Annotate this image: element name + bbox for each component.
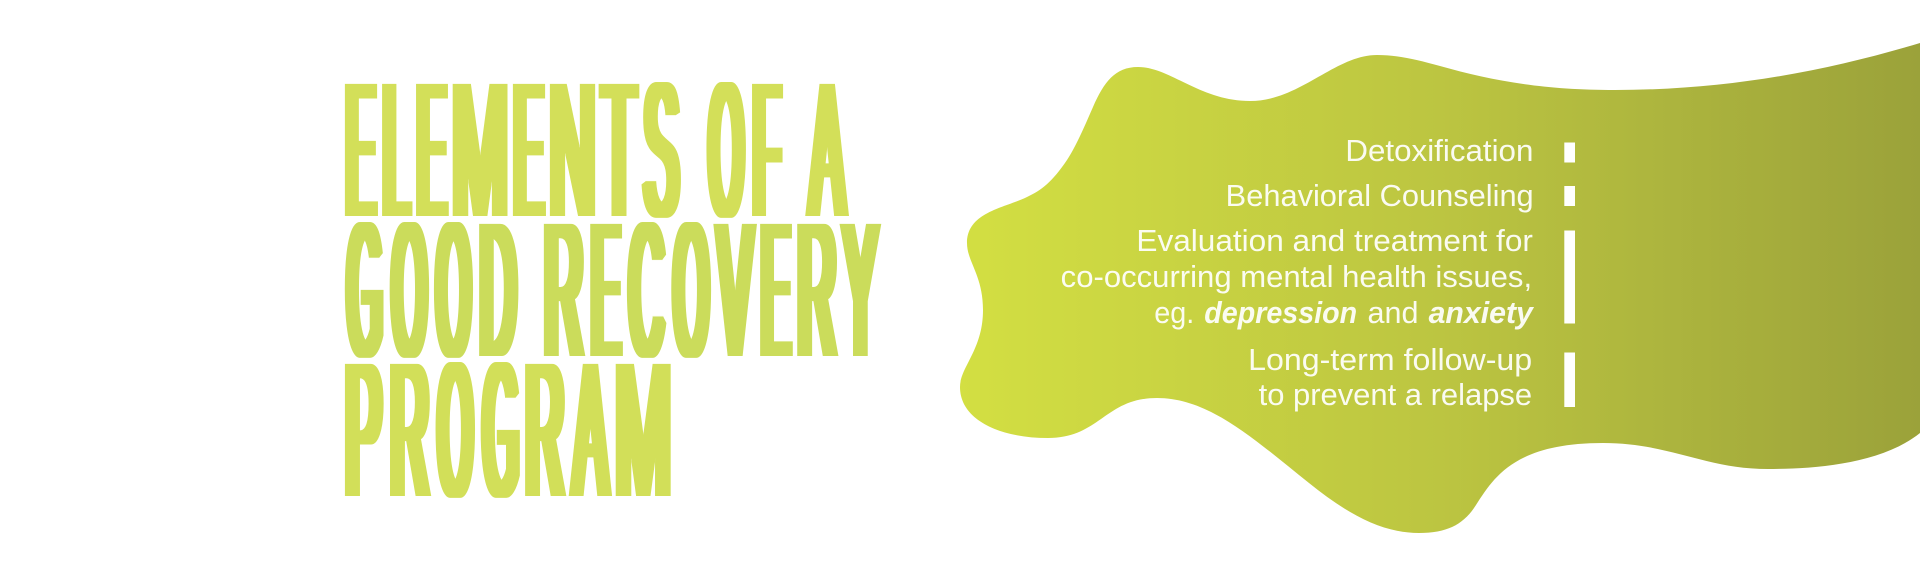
heading line 2: O [437, 182, 470, 397]
heading line 3: R [391, 322, 429, 537]
heading line 2: V [718, 182, 752, 397]
item: evaluation and treatment: and [1368, 296, 1418, 330]
heading: elements of a good recovery program [346, 42, 877, 537]
heading line 1: S [644, 42, 678, 257]
heading line 1: L [383, 42, 409, 257]
heading: elements of a good recovery program: M [615, 322, 671, 537]
item: detoxification: Detoxification [1345, 134, 1533, 168]
heading line 3: G [483, 322, 518, 537]
heading line 3: P [346, 322, 382, 537]
heading line 2: O [674, 182, 708, 397]
heading line 2: G [348, 182, 382, 397]
heading line 3: A [574, 322, 607, 537]
heading line 3: O [438, 322, 472, 537]
item: evaluation and treatment: eg. [1154, 296, 1194, 330]
heading line 2: R [544, 182, 583, 397]
heading: elements of a good recovery program: A [810, 42, 844, 257]
item: evaluation and treatment [1061, 224, 1575, 330]
heading line 1: M [452, 42, 508, 257]
item: evaluation and treatment: anxiety [1429, 296, 1535, 330]
heading line 1: E [418, 42, 446, 257]
heading line 2: C [630, 182, 663, 397]
heading line 2: O [393, 182, 426, 397]
heading line 2: D [480, 182, 516, 397]
heading line 2: R [798, 182, 836, 397]
heading line 1: E [346, 42, 375, 257]
heading line 2: E [592, 182, 620, 397]
heading line 1: T [602, 42, 636, 257]
item: evaluation and treatment: depression [1204, 296, 1357, 330]
panel: green gradient blob [960, 43, 1920, 533]
item: long-term follow-up [1248, 343, 1575, 412]
text: Y [843, 182, 877, 397]
item: long-term follow-up: Long-term follow-up [1248, 343, 1532, 377]
heading line 3: R [526, 322, 564, 537]
item: long-term follow-up: to prevent a relapse [1259, 378, 1532, 412]
list: recovery program elements [1061, 134, 1575, 412]
item: behavioral counseling: Behavioral Counseling [1226, 179, 1534, 213]
heading line 2: E [762, 182, 790, 397]
heading line 1: O [709, 42, 743, 257]
item: evaluation and treatment: Evaluation and treatment for [1136, 224, 1533, 258]
heading line 1: E [514, 42, 543, 257]
heading line 1: N [550, 42, 595, 257]
heading line 1: F [754, 42, 780, 257]
item: evaluation and treatment: co-occurring mental health issues, [1061, 260, 1532, 294]
